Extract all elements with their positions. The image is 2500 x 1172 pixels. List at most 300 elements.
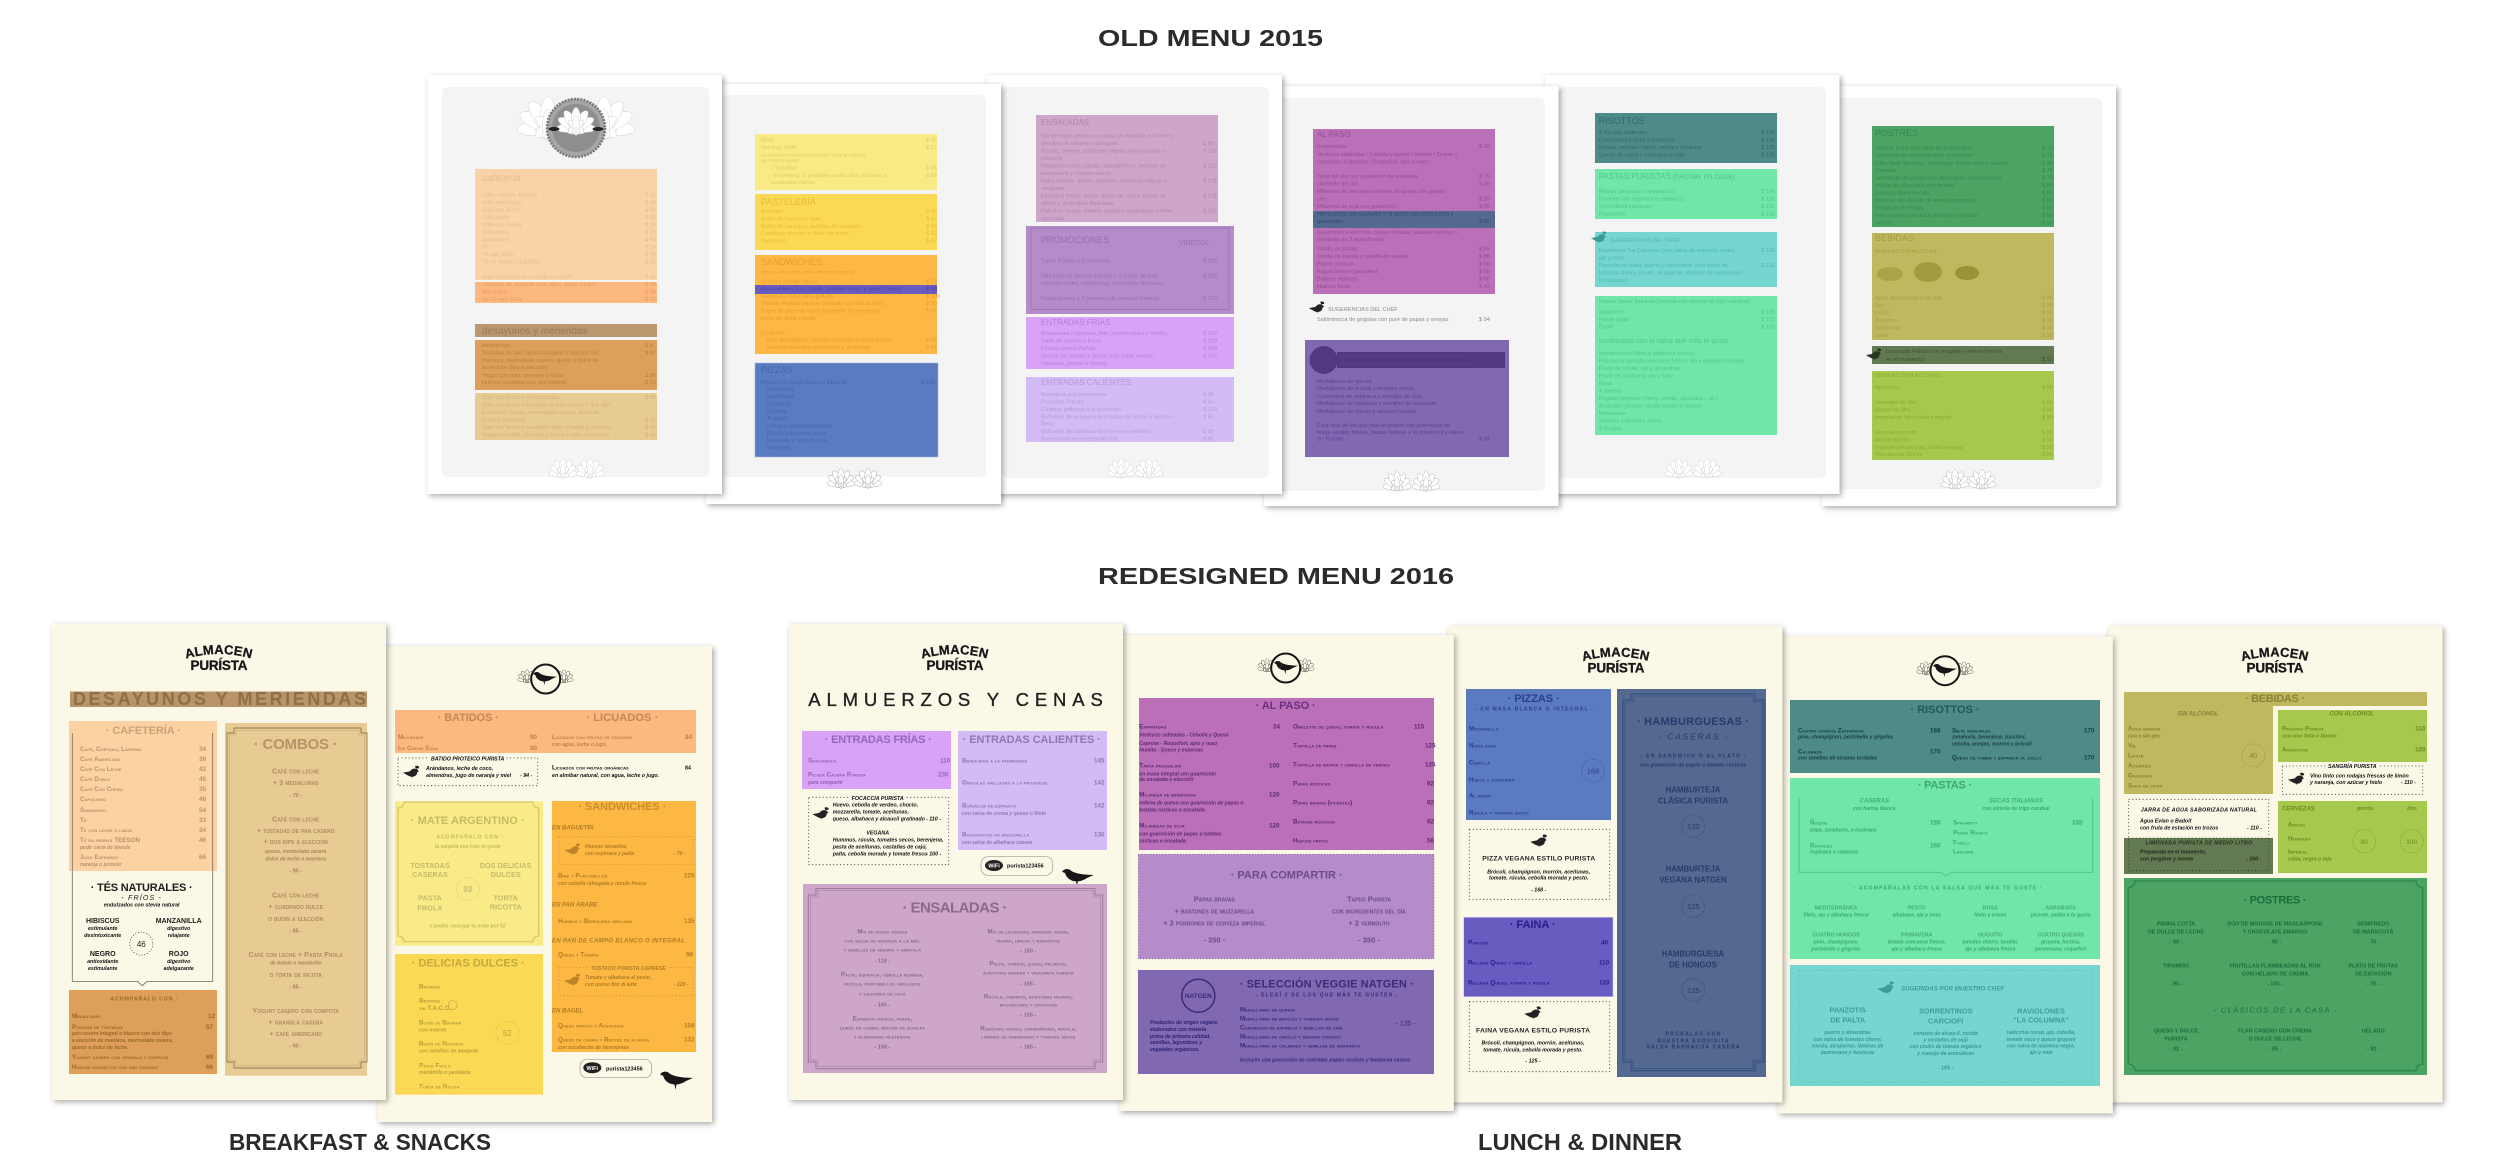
panel: pizzas: Huevo y aceitunas bbox=[1469, 777, 1515, 784]
sheet 6: desserts and drinks: $ 72 bbox=[2042, 153, 2053, 159]
callout: pizza vegana: Brócoli, champignon, morrón, aceitunas, bbox=[1487, 870, 1591, 876]
panel: faina: 120 bbox=[1599, 980, 1610, 987]
panel: hamburguesas: HAMBURTEJA bbox=[1666, 865, 1721, 874]
panel: al paso: Humita - Queso y especias bbox=[1139, 748, 1203, 754]
panel: acompanalo con: Huevos revueltos con pan tostado bbox=[72, 1064, 158, 1071]
sheet 4: al paso and natgen: Guarnición a elección: papas rústicas, batatas rústicas o bbox=[1317, 230, 1457, 236]
sheet 5: risottos and pastas: $ 116 bbox=[1761, 212, 1775, 218]
sheet 1: cover and breakfasts: Licuados de estación (con agua, leche o jugo) bbox=[482, 282, 596, 288]
sheet 1: cover and breakfasts: Té con leche bbox=[482, 252, 514, 258]
sheet 4: al paso and natgen: ensalada de 3 ingredientes bbox=[1317, 237, 1384, 243]
sheet 2: mate, sandwiches, pizzas: Brownie bbox=[761, 209, 781, 215]
panel: postres: PLATO DE FRUTAS bbox=[2348, 964, 2399, 970]
sheet 2: mate, sandwiches, pizzas: - Pastelería (2 unidades a elección): budines o bbox=[771, 173, 886, 179]
panel: delicias dulces: membrillo o pastelera bbox=[419, 1070, 471, 1076]
panel: para compartir: + 2 vermouth bbox=[1348, 919, 1390, 928]
panel: cervezas: litro bbox=[2407, 806, 2417, 812]
sheet 1: cover and breakfasts: Café con leche + 3 medialunas bbox=[482, 395, 559, 401]
panel: risottos: Siete vegetales bbox=[1952, 727, 1991, 734]
text: licuados organicos bbox=[552, 765, 691, 779]
panel: bebidas sin alcohol: Vie bbox=[2128, 743, 2136, 750]
sheet 5: risottos and pastas: $ 126 bbox=[1761, 138, 1775, 144]
sheet 2: mate, sandwiches, pizzas: $ 40 bbox=[926, 216, 937, 222]
panel: ensaladas: aceitunas negras y vinagreta purista bbox=[983, 970, 1074, 977]
panel: pastas: CUATRO HONGOS bbox=[1812, 933, 1860, 939]
sheet 2: mate, sandwiches, pizzas: $ 90 bbox=[926, 301, 937, 307]
panel: sandwiches: · SANDWICHES · bbox=[578, 801, 666, 813]
panel: combos: + tostadas de pan casero bbox=[257, 826, 335, 835]
panel: ensaladas: y semillas de sésamo y amapola bbox=[844, 947, 921, 954]
panel: bebidas sin alcohol: Soda en sifón bbox=[2128, 783, 2162, 790]
sheet 2: mate, sandwiches, pizzas: Hummus y berenjena grillada bbox=[761, 294, 834, 300]
logo: PURÍSTA bbox=[190, 658, 248, 673]
sheet 4: al paso and natgen: guarnición bbox=[1317, 219, 1343, 225]
panel: combos: Café con leche + Pasta Frola bbox=[248, 950, 343, 959]
sheet 5: risottos and pastas: tomates cherry, rúcula, alcaparras, láminas de parmesano bbox=[1599, 270, 1743, 276]
panel: pastas: HUGUITO bbox=[1978, 933, 2002, 939]
sheet 6: desserts and drinks: $ 80 bbox=[2042, 400, 2053, 406]
panel: ensaladas bbox=[803, 884, 1107, 1073]
panel: limonada purista: Preparada en el momento, bbox=[2140, 850, 2207, 856]
panel: sugeridas por chef: y manojo de aromáticas bbox=[1916, 1051, 1974, 1057]
sheet 6: desserts and drinks: $ 60 bbox=[2042, 220, 2053, 226]
panel: pastas: SECAS ITALIANAS bbox=[1989, 799, 2043, 805]
panel: sugeridas por chef: "LA COLUMNA" bbox=[2013, 1016, 2069, 1025]
sheet 6: desserts and drinks: BEBIDAS SIN ALCOHOL bbox=[1875, 249, 1938, 255]
callout: tes naturales: · TÉS NATURALES · bbox=[91, 881, 193, 894]
panel: cervezas: porrón bbox=[2356, 806, 2373, 812]
sheet 2: mate, sandwiches, pizzas: $ 40 bbox=[926, 231, 937, 237]
panel: entradas calientes: 145 bbox=[1094, 758, 1105, 765]
sheet 4: al paso and natgen: Medallones de choclo y sésamo tostado bbox=[1317, 409, 1417, 415]
sheet 3: salads and starters: VINECOL bbox=[1179, 240, 1210, 247]
sheet 4: al paso and natgen: especias / Capresse / Roquefort, apio y nuez bbox=[1317, 160, 1429, 166]
panel: limonada purista: - 100 - bbox=[2246, 857, 2262, 863]
sheet 4: al paso and natgen: $ 85 bbox=[1479, 196, 1490, 202]
sheet 1: cover and breakfasts: Café doble bbox=[482, 215, 509, 221]
sheet 3: salads and starters: alfalfa y almendras fileteadas bbox=[1041, 201, 1114, 207]
panel: hamburguesas: 120 bbox=[1687, 822, 1700, 831]
panel: pastas: ROSA bbox=[1983, 905, 1998, 911]
heading: desayunos y meriendas: DESAYUNOS Y MERIENDAS bbox=[73, 689, 366, 709]
panel: batidos and licuados: 90 bbox=[530, 734, 538, 741]
sheet 6: desserts and drinks: en el momento) bbox=[1886, 357, 1925, 363]
sheet 4: al paso and natgen: $ 42 bbox=[1479, 284, 1490, 290]
panel: para compartir: + bastones de muzzarella bbox=[1175, 907, 1254, 916]
panel: pastas bbox=[1790, 778, 2100, 959]
panel: cafeteria bbox=[69, 721, 217, 871]
panel: sandwiches: Queso fresco y Aceitunas bbox=[558, 1023, 624, 1030]
icon: lotus pair bbox=[1383, 472, 1440, 492]
sheet 2: mate, sandwiches, pizzas: Budín de banana y nuez bbox=[761, 216, 822, 222]
sheet 5: risottos and pastas: $ 110 bbox=[1761, 317, 1775, 323]
sheet 1: cover and breakfasts: $ 42 bbox=[645, 350, 656, 356]
sheet 2: mate, sandwiches, pizzas: Espinaca y salsa blanca bbox=[767, 438, 828, 444]
panel: seleccion veggie natgen: Cuadrados de espinaca y semillas de chía bbox=[1240, 1025, 1343, 1032]
panel: para compartir: · PARA COMPARTIR · bbox=[1231, 869, 1343, 881]
sheet 5: risottos and pastas: Papardelle bbox=[1599, 212, 1625, 218]
panel: acompanalo con: Medialunas bbox=[72, 1013, 101, 1020]
sheet 6: desserts and drinks: Ensalada de Frutas bbox=[1875, 206, 1924, 212]
sheet 6: desserts and drinks: Tiramisú bbox=[1875, 168, 1896, 174]
panel: pastas: tomates cherry, tomillo, bbox=[1962, 940, 2018, 946]
sheet 4: al paso and natgen: $ 85 bbox=[1479, 182, 1490, 188]
panel: pastas: Ravioles bbox=[1810, 842, 1832, 849]
panel: hamburguesas: HAMBURGUESA bbox=[1662, 950, 1725, 959]
sheet 1: cover and breakfasts: $ 60 bbox=[645, 290, 656, 296]
panel: sandwiches: 108 bbox=[684, 1023, 695, 1030]
sheet 5: risottos and pastas: Ñoquis (de papa o remolacha) bbox=[1599, 189, 1674, 195]
panel: combos: Café con leche bbox=[272, 814, 320, 823]
callout: tes naturales: estimulante bbox=[88, 966, 117, 972]
sheet 4: al paso and natgen: AL PASO bbox=[1317, 130, 1350, 139]
text: licuados organicos: 84 bbox=[685, 766, 691, 772]
panel: limonada purista: con jengibre y menta bbox=[2140, 857, 2193, 863]
panel: sugeridas por chef: con coulis de tomate orgánico bbox=[1910, 1044, 1982, 1050]
panel: al paso: 92 bbox=[1427, 800, 1435, 807]
panel: seleccion veggie natgen: prima de primera calidad, bbox=[1149, 1034, 1211, 1040]
panel: seleccion veggie natgen: Productos de origen vegano bbox=[1150, 1020, 1218, 1026]
sheet 6: desserts and drinks: Queso y dulce Purista bbox=[1875, 190, 1930, 196]
sheet 2: mate, sandwiches, pizzas: (en pan de campo, árabe, blanco o integral) bbox=[761, 270, 854, 276]
sheet 6: desserts and drinks: Flan casero (con dulce de leche o crema) bbox=[1875, 213, 1978, 219]
callout: pizza vegana: - 168 - bbox=[1531, 888, 1547, 894]
panel: ensaladas: - 158 - bbox=[874, 1045, 890, 1051]
sheet 3: salads and starters: Espinaca fresca, peras, queso de cabra, brotes de bbox=[1041, 194, 1166, 200]
text: licuados organicos: Licuados con frutas orgánicas bbox=[552, 765, 629, 772]
sheet 4: al paso and natgen: Medallones de quinoa bbox=[1317, 379, 1373, 385]
callout: focaccia purista: - 100 - bbox=[926, 852, 942, 858]
panel: combos: Yogurt casero con compota bbox=[252, 1006, 339, 1015]
sheet 2: mate, sandwiches, pizzas: Mozzarella bbox=[767, 387, 795, 393]
sheet 6: desserts and drinks: Amstel porrón bbox=[1875, 438, 1910, 444]
sheet 1: cover and breakfasts: $ 30 bbox=[645, 215, 656, 221]
panel: postres: DE MARACUYÁ bbox=[2353, 929, 2394, 936]
panel: seleccion veggie natgen: Medallones de quinoa bbox=[1240, 1007, 1295, 1014]
panel: pizzas: - EN MASA BLANCA O INTEGRAL - bbox=[1475, 707, 1593, 713]
panel: hamburguesas: 125 bbox=[1687, 986, 1700, 995]
icon: bird emblem bbox=[1257, 654, 1315, 682]
sheet 4: al paso and natgen: Milanesa de soja con guarnición bbox=[1317, 204, 1397, 210]
panel: entradas calientes: con salsa de albahaca casera bbox=[962, 840, 1032, 846]
panel: delicias dulces: con nueces bbox=[419, 1028, 447, 1034]
sheet 1: cover and breakfasts: $ 55 bbox=[645, 380, 656, 386]
sheet 1: cover and breakfasts: manteca, mermelada casera, queso o dulce de bbox=[482, 358, 599, 364]
sheet 3: salads and starters: $ 86 bbox=[1203, 414, 1214, 420]
callout: faina vegana: Brócoli, champignon, morrón, aceitunas, bbox=[1481, 1041, 1585, 1047]
sheet 3: salads and starters: $ 100 bbox=[1203, 407, 1217, 413]
sheet 5: risottos and pastas: 4 Hongos zafferano bbox=[1599, 130, 1647, 136]
sheet 2: mate, sandwiches, pizzas: cuadrados dulces bbox=[771, 180, 815, 186]
panel: pizzas: 168 bbox=[1587, 766, 1599, 776]
callout: tes naturales: antioxidante bbox=[87, 959, 118, 965]
panel: entradas calientes: Buñuelos de espinaca bbox=[962, 803, 1016, 810]
callout: focaccia purista: Hummus, rúcula, tomates secos, berenjena, bbox=[833, 838, 944, 844]
panel: seleccion veggie natgen bbox=[1138, 970, 1434, 1074]
icon: lotus pair bbox=[1941, 470, 1996, 490]
panel: delicias dulces: · DELICIAS DULCES · bbox=[412, 958, 525, 970]
panel: pastas: con harina blanca bbox=[1853, 806, 1896, 812]
sheet 1: cover and breakfasts: $ 62 bbox=[645, 418, 656, 424]
panel: sandwiches: 98 bbox=[686, 952, 694, 959]
section: breakfast pages bbox=[50, 622, 718, 1128]
panel: combos: queso, mermelada casera bbox=[265, 849, 326, 855]
panel: faina: 40 bbox=[1601, 940, 1609, 947]
sheet 5: risottos and pastas: Fusile bbox=[1599, 324, 1614, 330]
sheet 2: mate, sandwiches, pizzas: Napolitana bbox=[767, 394, 795, 400]
panel: ensaladas: y almendras fileteadas bbox=[854, 1034, 911, 1041]
sheet 6: desserts and drinks: $ 80 bbox=[2042, 183, 2053, 189]
panel: sugeridas por chef: radicchio rosso, ajo, cebolla, bbox=[2007, 1030, 2075, 1036]
panel: postres: FLAN CASERO CON CREMA bbox=[2238, 1029, 2312, 1035]
logo bbox=[1583, 647, 1650, 676]
sheet 5: risottos and pastas: $ 116 bbox=[1761, 196, 1775, 202]
panel: ensaladas: queso de cabra, brotes de alfalfa bbox=[840, 1025, 925, 1032]
callout: tes naturales: adelgazante bbox=[164, 966, 194, 972]
icon: bird bbox=[1062, 869, 1094, 886]
panel: cafeteria: 54 bbox=[199, 807, 207, 814]
sheet 2: mate, sandwiches, pizzas: Huevos revueltos con morrón y aceitunas bbox=[767, 345, 870, 351]
panel: mate argentino bbox=[395, 801, 543, 946]
callout: wifi: WiFi bbox=[587, 1066, 599, 1072]
panel: sandwiches: con espinaca y palta bbox=[585, 851, 634, 857]
panel: sandwiches: EN BAGEL bbox=[552, 1008, 583, 1014]
sheet 2: mate, sandwiches, pizzas: Morrones bbox=[767, 446, 791, 452]
sheet 5: risottos and pastas: Rosa bbox=[1599, 381, 1613, 387]
panel: sugeridas por chef: CARCIOFI bbox=[1928, 1017, 1963, 1026]
panel: ensaladas: - 165 - bbox=[1020, 1045, 1036, 1051]
panel: delicias dulces: sin T.A.C.C. bbox=[419, 1005, 451, 1012]
logo: ALMACEN bbox=[186, 644, 252, 659]
panel: ensaladas: · ENSALADAS · bbox=[902, 900, 1008, 917]
sheet 2: mate, sandwiches, pizzas: Brie, portobellos, cebolla rehogada y rúcula fresca bbox=[767, 338, 891, 344]
panel: seleccion veggie natgen: - 135 - bbox=[1396, 1021, 1416, 1028]
panel: combos bbox=[225, 723, 367, 1076]
logo: PURÍSTA bbox=[2246, 660, 2304, 676]
sheet 5: risottos and pastas: combinalas con la salsa que más te guste bbox=[1599, 338, 1729, 345]
title: old menu: OLD MENU 2015 bbox=[1098, 25, 1323, 51]
panel: postres: PURISTA bbox=[2164, 1037, 2188, 1043]
panel: ensaladas: Radicchio rosso, champiñones, rúcula, bbox=[980, 1026, 1077, 1033]
panel: combos: + café americano bbox=[269, 1029, 322, 1038]
sheet 4: al paso and natgen bbox=[1264, 86, 1558, 506]
sheet 2: mate, sandwiches, pizzas: Provoleta bbox=[767, 402, 792, 408]
icon: chef bird bbox=[1309, 302, 1324, 314]
callout: focaccia purista: pasta de aceitunas, castañas de cajú, bbox=[832, 845, 927, 851]
panel: cafeteria: Submarino bbox=[80, 807, 106, 814]
sheet 3: salads and starters: ENSALADAS bbox=[1041, 118, 1089, 127]
icon: bird emblem bbox=[1916, 656, 1974, 685]
logo bbox=[922, 644, 988, 673]
panel: sugeridas por chef: y castañas de cajú bbox=[1923, 1037, 1968, 1043]
logo bbox=[2242, 647, 2308, 676]
sheet 5: risottos and pastas: Huguito (tomates cherry, tomillo, albahaca y ajo) bbox=[1599, 396, 1718, 402]
sheet 1: cover and breakfasts: $ 24 bbox=[645, 244, 656, 250]
panel: pastas: Linguine bbox=[1953, 849, 1974, 856]
panel: hamburguesas: con guarnición de papas o batatas rústicas bbox=[1640, 763, 1746, 769]
callout: wifi: purista123456 bbox=[606, 1066, 643, 1072]
panel: entradas calientes: Berenjena a la parmesana bbox=[962, 758, 1027, 765]
panel: seleccion veggie natgen: Medallones de brócoli y tomates secos bbox=[1240, 1016, 1339, 1023]
sheet 6: desserts and drinks: $ 72 bbox=[2042, 146, 2053, 152]
panel: cafeteria: Café Con Crema bbox=[80, 786, 123, 793]
sheet 2: mate, sandwiches, pizzas: que más te guste bbox=[761, 158, 798, 164]
sheet 2: mate, sandwiches, pizzas: Mate bbox=[761, 138, 773, 144]
panel: pastas: Spaghetti bbox=[1953, 819, 1977, 826]
page 5: pizzas, faina, hamburguesas bbox=[1446, 624, 1788, 1108]
icon: natgen badge bbox=[1182, 979, 1215, 1012]
caption: breakfast and snacks: BREAKFAST & SNACKS bbox=[229, 1129, 491, 1155]
panel: sugeridas por chef: con salsa de tomates cherry, bbox=[1813, 1037, 1882, 1043]
sheet 6: desserts and drinks: $ 35 bbox=[2042, 310, 2053, 316]
panel: risottos: 170 bbox=[1930, 749, 1941, 756]
panel: sandwiches: EN PAN ÁRABE bbox=[552, 902, 598, 909]
panel: faina: Rellena Queso y cebolla bbox=[1468, 960, 1532, 967]
sheet 4: al paso and natgen: $ 68 bbox=[1479, 262, 1490, 268]
text: suggestion bbox=[1317, 307, 1490, 323]
sheet 3: salads and starters: Picada casera Purista bbox=[1041, 346, 1095, 352]
sheet 1: cover and breakfasts: Café con leche + tostadas de pan casero + dos dips bbox=[482, 402, 611, 408]
panel: acompanalo con: Yogurt casero con granola y compota bbox=[72, 1054, 169, 1061]
sheet 6: desserts and drinks: Ser bbox=[1875, 303, 1884, 309]
sheet 6: desserts and drinks: Semifredo de vainilla con almendras acarameladas bbox=[1875, 176, 2002, 182]
panel: ensaladas: - 165 - bbox=[1020, 982, 1036, 988]
panel: batidos and licuados: Milkshake bbox=[398, 734, 424, 741]
sheet 1: cover and breakfasts: leche o manteca) bbox=[482, 418, 525, 424]
text: suggestion: $ 94 bbox=[1479, 317, 1490, 323]
panel: hamburguesas: DE HONGOS bbox=[1669, 961, 1717, 970]
panel: al paso: con guarnición de papas o batatas bbox=[1139, 832, 1222, 838]
callout: tes naturales: desintoxicante bbox=[84, 933, 121, 939]
panel: mate argentino: · MATE ARGENTINO · bbox=[411, 815, 525, 827]
panel: hamburguesas: PROBALAS CON bbox=[1666, 1032, 1721, 1038]
panel: delicias dulces: Pasta Frola bbox=[419, 1063, 451, 1070]
sheet 4: al paso and natgen: hojas verdes, brotes, papas rústicas a la provenzal y adere- bbox=[1317, 430, 1465, 436]
sheet 3: salads and starters: vinagreta bbox=[1041, 186, 1065, 192]
sheet 1: cover and breakfasts: Café americano bbox=[482, 200, 522, 206]
panel: sandwiches: 120 bbox=[684, 873, 695, 880]
sheet 6: desserts and drinks: Amstel de litro bbox=[1875, 408, 1910, 414]
panel: con alcohol: Pingüino Purista bbox=[2282, 726, 2324, 733]
sheet 4: al paso and natgen: Tarta del día con guarnición de ensalada bbox=[1317, 174, 1418, 180]
heading: almuerzos y cenas: ALMUERZOS Y CENAS bbox=[808, 689, 1103, 710]
sheet 1: cover and breakfasts: Capuchino bbox=[482, 230, 509, 236]
sheet 6: desserts and drinks: POSTRES bbox=[1875, 128, 1918, 138]
sheet 6: desserts and drinks: $ 80 bbox=[2042, 415, 2053, 421]
sheet 5: risottos and pastas: Rúcula, tomates cherry, menta y bouissac bbox=[1599, 145, 1702, 151]
panel: pizzas: Cebolla bbox=[1469, 760, 1490, 767]
panel: seleccion veggie natgen: Medallones de choclo y sésamo tostado bbox=[1240, 1034, 1341, 1041]
sheet 2: mate, sandwiches, pizzas: Huevo y aceitunas negras bbox=[767, 424, 832, 430]
panel: al paso: 120 bbox=[1269, 792, 1280, 799]
panel: batidos and licuados: Ice Cream Soda bbox=[398, 745, 438, 752]
section: lunch and dinner pages bbox=[788, 622, 2448, 1119]
panel: al paso: 56 bbox=[1427, 838, 1435, 845]
panel: postres: - 90 - bbox=[2269, 940, 2282, 946]
panel: combos: dulce de leche o manteca bbox=[265, 857, 326, 863]
sheet 3: salads and starters: fileto) bbox=[1041, 422, 1055, 428]
panel: combos: + dos dips a elección bbox=[264, 837, 328, 846]
panel: al paso: Tortilla de papas bbox=[1293, 743, 1337, 750]
sheet 2: mate, sandwiches, pizzas: $ 90 bbox=[926, 286, 937, 292]
panel: acompanalo con bbox=[69, 990, 217, 1074]
sheet 6: desserts and drinks: Heineken porrón bbox=[1875, 430, 1916, 436]
panel: bebidas sin alcohol: Gaseosas bbox=[2128, 773, 2153, 780]
sheet 5: risottos and pastas: Queso de cabra y espinaca al ajillo bbox=[1599, 152, 1685, 158]
panel: cervezas: 100 bbox=[2406, 839, 2418, 846]
callout: sangria purista bbox=[2282, 763, 2423, 794]
panel: risottos: Queso de cabra y espinaca al ajillo bbox=[1952, 755, 2042, 762]
sheet 1: cover and breakfasts: Medialunas bbox=[482, 343, 511, 349]
sheet 2: mate, sandwiches, pizzas: $ 68 bbox=[926, 173, 937, 179]
sheet 3: salads and starters: $ 118 bbox=[1203, 194, 1217, 200]
panel: postres: HELADO bbox=[2362, 1029, 2385, 1035]
panel: ensaladas: - 165 - bbox=[874, 1003, 890, 1009]
sheet 3: salads and starters: $ 86 bbox=[1203, 436, 1214, 442]
panel: delicias dulces: con semillas de amapola bbox=[419, 1049, 478, 1055]
panel: cafeteria: 66 bbox=[199, 854, 207, 861]
sheet 6: desserts and drinks: Aperitivos bbox=[1875, 385, 1900, 391]
panel: pizzas: Mozzarella bbox=[1469, 726, 1499, 733]
panel: cafeteria: 38 bbox=[199, 756, 207, 763]
sheet 1: cover and breakfasts: $ 44 bbox=[645, 274, 656, 280]
sheet 3: salads and starters: $ 120 bbox=[1203, 331, 1217, 337]
panel: combos: + cuadrado dulce bbox=[268, 902, 324, 911]
panel: cafeteria: 35 bbox=[199, 786, 207, 793]
panel: al paso: Batatas rústicas bbox=[1293, 819, 1335, 826]
panel: pizzas: Al pesto bbox=[1469, 793, 1491, 800]
sheet 3: salads and starters: $ 86 bbox=[1203, 400, 1214, 406]
sheet 6: desserts and drinks: $ 35 bbox=[2042, 303, 2053, 309]
panel: pastas: picante, pedila a tu gusto bbox=[2030, 913, 2091, 919]
callout: pizza vegana: PIZZA VEGANA ESTILO PURISTA bbox=[1482, 856, 1595, 863]
panel: al paso: Omelette de queso, tomate y rúcula bbox=[1293, 724, 1383, 731]
panel: entradas calientes: 130 bbox=[1094, 832, 1105, 839]
sheet 3: salads and starters: $ 170 bbox=[1203, 296, 1217, 302]
panel: seleccion veggie natgen: Medallones de calabaza y semillas de amaranto bbox=[1240, 1043, 1360, 1050]
panel: risottos: pino, champignon, portobello y gírgolas bbox=[1797, 735, 1893, 741]
sheet 3: salads and starters: parmesano y tomates secos bbox=[1041, 171, 1111, 177]
sheet 6: desserts and drinks: Tiffin 'Andi' (brownie, merengue, frutos rojos y helado) bbox=[1875, 161, 2008, 167]
sheet 4: al paso and natgen: Cuadrados de espinaca y semillas de chía bbox=[1317, 394, 1423, 400]
callout: tes naturales: estimulante bbox=[88, 926, 117, 932]
sheet 1: cover and breakfasts: Café con crema bbox=[482, 222, 521, 228]
sheet 5: risottos and pastas: $ 116 bbox=[1761, 248, 1775, 254]
icon: lotus pair bbox=[827, 468, 882, 489]
panel: faina bbox=[1464, 917, 1613, 997]
sheet 2: mate, sandwiches, pizzas: Budín de naranja y semillas de amapola bbox=[761, 224, 861, 230]
callout: focaccia purista: - 110 - bbox=[926, 817, 941, 823]
callout: focaccia purista: mozzarella, tomate, aceitunas, bbox=[833, 810, 909, 816]
panel: risottos: con semillas de sésamo tostadas bbox=[1798, 756, 1877, 762]
callout: pizza vegana: tomate, rúcula, cebolla morada y pesto. bbox=[1489, 876, 1589, 882]
callout: faina vegana: - 125 - bbox=[1525, 1059, 1541, 1065]
icon: round lotus logo bbox=[517, 96, 635, 157]
sheet 6: desserts and drinks: $ 56 bbox=[2042, 445, 2053, 451]
panel: cafeteria: pedir carta de blends bbox=[79, 845, 131, 851]
panel: para compartir: Tapeo Purista bbox=[1347, 895, 1391, 904]
panel: mate argentino: FROLA bbox=[417, 904, 443, 913]
sheet 3: salads and starters: $ 102 bbox=[1203, 354, 1217, 360]
sheet 4: al paso and natgen: Tortilla de batata y cebolla de verdeo bbox=[1317, 254, 1408, 260]
sheet 6: desserts and drinks: $ 56 bbox=[2042, 438, 2053, 444]
panel: para compartir: + 2 porrones de cerveza imperial bbox=[1163, 919, 1265, 928]
sheet 4: al paso and natgen: Verduras salteadas / Cebolla y queso / Humita / Queso y bbox=[1317, 152, 1458, 158]
sheet 1: cover and breakfasts: $ 50 bbox=[645, 395, 656, 401]
sheet 2: mate, sandwiches, pizzas: brotes de alfalfa y rúcula bbox=[761, 316, 816, 322]
panel: hamburguesas: NUESTRA EXQUISITA bbox=[1658, 1039, 1729, 1045]
sheet 1: cover and breakfasts: Milkshake bbox=[482, 290, 507, 296]
